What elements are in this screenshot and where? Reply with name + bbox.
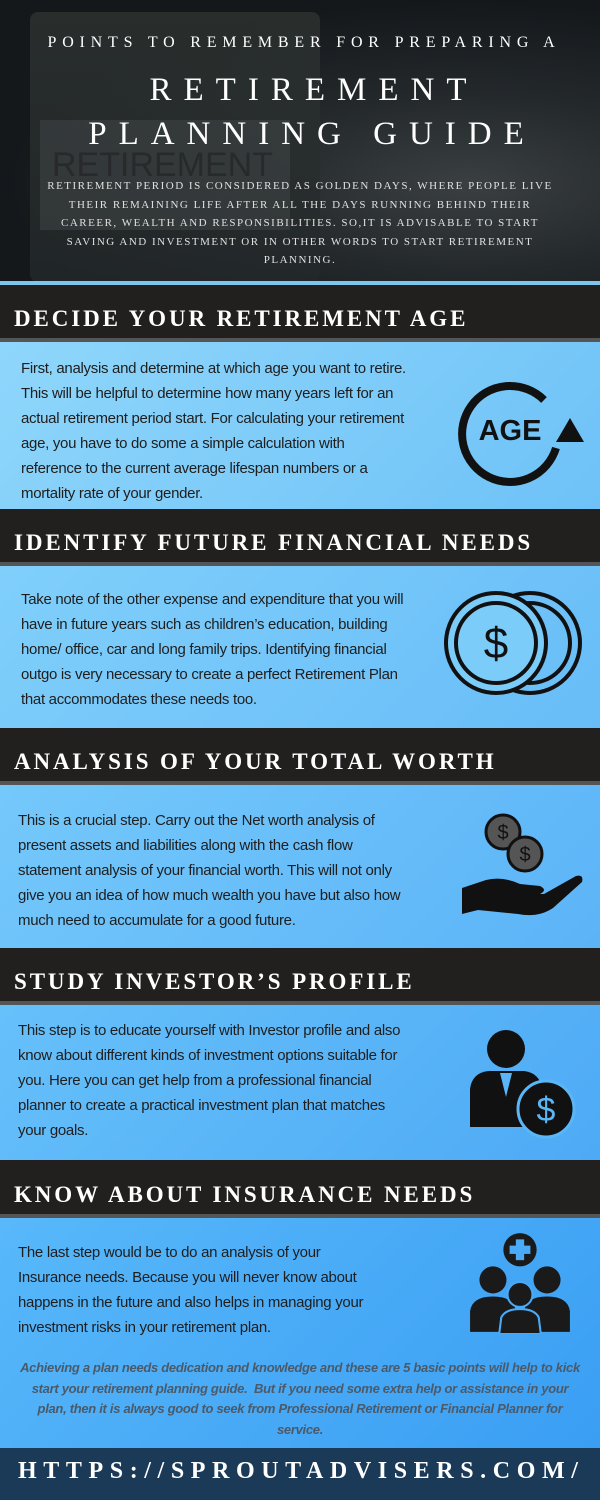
icon: hand with coins bbox=[462, 814, 582, 916]
icon: age: AGE bbox=[479, 415, 541, 447]
icon: hand with coins: $ bbox=[519, 844, 531, 866]
heading: insurance bbox=[0, 1160, 600, 1218]
heading: decide: DECIDE YOUR RETIREMENT AGE bbox=[14, 306, 468, 331]
panel: decide bbox=[0, 342, 600, 509]
heading: analysis bbox=[0, 728, 600, 785]
heading: identify bbox=[0, 509, 600, 566]
heading: identify: IDENTIFY FUTURE FINANCIAL NEEDS bbox=[14, 530, 533, 555]
panel: insurance bbox=[0, 1218, 600, 1448]
icon: family insurance bbox=[470, 1233, 570, 1334]
icon: age bbox=[458, 382, 584, 486]
title: RETIREMENT bbox=[150, 72, 478, 108]
footer url: HTTPS://SPROUTADVISERS.COM/ bbox=[18, 1458, 584, 1484]
icon: hand with coins: $ bbox=[497, 822, 509, 844]
header bbox=[0, 0, 600, 282]
intro text: RETIREMENT PERIOD IS CONSIDERED AS GOLDEN DAYS, WHERE PEOPLE LIVE THEIR REMAINING LIFE AFTER ALL THE DAYS RUNNING BEHIND THEIR CAREER, WEALTH AND RESPONSIBILITIES. SO,IT IS ADVISABLE TO START SAVING AND INVESTMENT OR IN OTHER WORDS TO START RETIREMENT PLANNING. bbox=[47, 180, 553, 266]
text: The last step would be to do an analysis of your Insurance needs. Because you will never know about happens in the future and also helps in managing your investment risks in your retirement plan. bbox=[18, 1244, 363, 1336]
heading: insurance: KNOW ABOUT INSURANCE NEEDS bbox=[14, 1182, 475, 1207]
heading: study bbox=[0, 948, 600, 1005]
icon: investor bbox=[470, 1030, 576, 1138]
title line 2: PLANNING GUIDE bbox=[88, 116, 536, 152]
closing text: Achieving a plan needs dedication and knowledge and these are 5 basic points will help to kick start your retirement planning guide. But if you need some extra help or assistance in your plan, then it is always good to seek from Professional Retirement or Financial Planner for service. bbox=[20, 1360, 580, 1436]
text: Take note of the other expense and expenditure that you will have in future years such as children’s education, building home/ office, car and long family trips. Identifying financial outgo is very necessary to create a perfect Retirement Plan that accommodates these needs too. bbox=[21, 591, 403, 708]
jar retirement text: RETIREMENT bbox=[52, 146, 273, 184]
icon: investor: $ bbox=[537, 1091, 556, 1129]
icon: coins bbox=[444, 591, 582, 695]
footer url bbox=[0, 1448, 600, 1500]
text: First, analysis and determine at which age you want to retire. This will be helpful to determine how many years left for an actual retirement period start. For calculating your retirement age, you have to do some a simple calculation with reference to the current average lifespan numbers or a mortality rate of your gender. bbox=[21, 360, 406, 502]
panel: study bbox=[0, 1005, 600, 1160]
background jar bbox=[30, 12, 320, 282]
panel: analysis bbox=[0, 785, 600, 948]
heading: study: STUDY INVESTOR’S PROFILE bbox=[14, 969, 415, 994]
jar label bbox=[40, 120, 290, 230]
subtitle: POINTS TO REMEMBER FOR PREPARING A bbox=[48, 34, 560, 51]
icon: coins: $ bbox=[484, 619, 508, 668]
panel: identify bbox=[0, 566, 600, 728]
heading: analysis: ANALYSIS OF YOUR TOTAL WORTH bbox=[14, 749, 497, 774]
text: This is a crucial step. Carry out the Net worth analysis of present assets and liabilities along with the cash flow statement analysis of your financial worth. This will not only give you an idea of how much wealth you have but also how much need to accumulate for a good future. bbox=[18, 812, 400, 929]
heading: decide bbox=[0, 285, 600, 342]
text: This step is to educate yourself with Investor profile and also know about different kinds of investment options suitable for you. Here you can get help from a professional financial planner to create a practical investment plan that matches your goals. bbox=[18, 1022, 400, 1139]
